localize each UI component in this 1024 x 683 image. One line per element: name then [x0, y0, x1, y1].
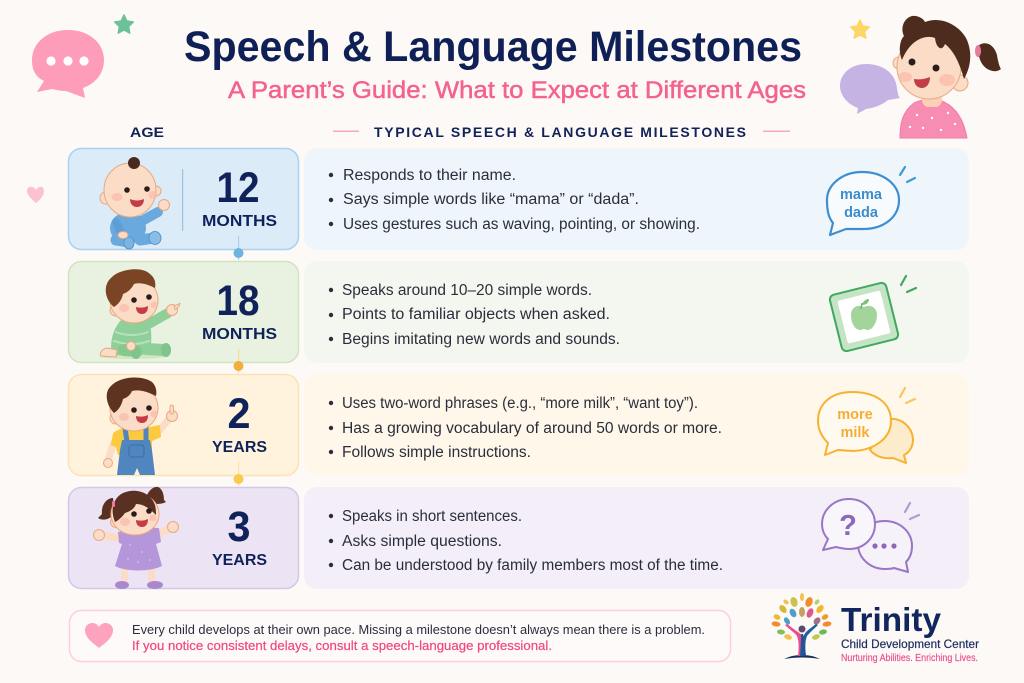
logo: Trinity Child Development Center: Trinity — [841, 601, 942, 638]
icon: pink heart — [27, 187, 44, 203]
list: 12 months: Responds to their name. — [343, 167, 516, 184]
list: 3 years: Asks simple questions. — [342, 533, 502, 550]
card: 3 years age — [68, 487, 298, 589]
header: age: AGE — [130, 124, 164, 140]
card: 12 months age: MONTHS — [202, 213, 277, 230]
icon: green star — [115, 15, 133, 33]
icon: question and ellipsis bubbles: ? — [839, 510, 857, 542]
icon: mama dada bubble: dada — [844, 205, 879, 221]
illustration: girl with pigtail — [893, 16, 1001, 138]
list: 2 years: Has a growing vocabulary of around 50 words or more. — [342, 420, 722, 437]
icon: note heart — [85, 623, 113, 648]
illustration: child in overalls — [104, 377, 178, 475]
icon: question and ellipsis bubbles — [822, 499, 919, 572]
list: 18 months: Begins imitating new words and sounds. — [342, 331, 620, 348]
card: 2 years age: YEARS — [212, 439, 267, 456]
card: 3 years age: YEARS — [212, 552, 267, 569]
icon: lilac speech bubble — [840, 64, 900, 114]
icon: apple flash card — [829, 276, 916, 352]
card: 18 months age: MONTHS — [202, 326, 277, 343]
icon: more milk bubbles: milk — [840, 425, 870, 441]
list: 3 years: Can be understood by family members most of the time. — [342, 557, 723, 574]
panel: 2 years milestones — [304, 374, 969, 476]
card: 12 months age — [68, 148, 298, 250]
icon: more milk bubbles: more — [837, 407, 873, 423]
connector: 18 months to 2 years — [234, 349, 244, 373]
list: 2 years: Uses two-word phrases (e.g., “more milk”, “want toy”). — [342, 395, 698, 412]
card: 3 years age: 3 — [228, 503, 250, 551]
list: 12 months: Says simple words like “mama” or “dada”. — [343, 191, 639, 208]
icon: pink speech bubble — [32, 30, 104, 98]
callout: parent note: Every child develops at their own pace. Missing a milestone doesn’t always mean there is a problem. — [132, 623, 705, 637]
card: 18 months age — [68, 262, 298, 362]
logo: Trinity Child Development Center — [771, 593, 979, 664]
panel: 12 months milestones — [304, 148, 969, 250]
icon: more milk bubbles — [818, 388, 915, 463]
list: 12 months: Uses gestures such as waving, pointing, or showing. — [343, 216, 700, 233]
title: Speech & Language Milestones — [184, 23, 802, 71]
list: 2 years — [329, 395, 722, 461]
list: 18 months: Points to familiar objects when asked. — [342, 306, 610, 323]
illustration: toddler pointing — [99, 269, 180, 359]
card: 12 months age: 12 — [216, 164, 260, 212]
subtitle: A Parent’s Guide: What to Expect at Different Ages — [228, 77, 806, 104]
logo: Trinity Child Development Center: Child Development Center — [841, 637, 979, 651]
card: 18 months age: 18 — [216, 277, 260, 325]
icon: mama dada bubble: mama — [840, 187, 883, 203]
illustration: girl in purple dress — [94, 487, 178, 589]
list: 18 months — [329, 282, 620, 348]
connector: 12 to 18 months — [234, 236, 244, 260]
list: 3 years — [329, 508, 723, 574]
illustration: baby waving — [100, 157, 170, 249]
panel: 18 months milestones — [304, 261, 969, 363]
logo tree — [771, 593, 832, 659]
logo: Trinity Child Development Center: Nurturing Abilities. Enriching Lives. — [841, 653, 978, 664]
list: 18 months: Speaks around 10–20 simple words. — [342, 282, 592, 299]
icon: mama dada bubble — [827, 167, 915, 235]
callout: parent note — [70, 610, 730, 662]
callout: parent note: If you notice consistent delays, consult a speech-language professional. — [132, 639, 552, 653]
icon: yellow star — [851, 20, 869, 38]
panel: 3 years milestones — [304, 487, 969, 589]
header: typical milestones: TYPICAL SPEECH & LANGUAGE MILESTONES — [374, 124, 746, 140]
list: 3 years: Speaks in short sentences. — [342, 508, 522, 525]
card: 2 years age — [68, 374, 298, 476]
list: 12 months — [329, 167, 700, 233]
card: 2 years age: 2 — [228, 390, 250, 438]
list: 2 years: Follows simple instructions. — [342, 444, 531, 461]
connector: 2 to 3 years — [234, 462, 244, 486]
